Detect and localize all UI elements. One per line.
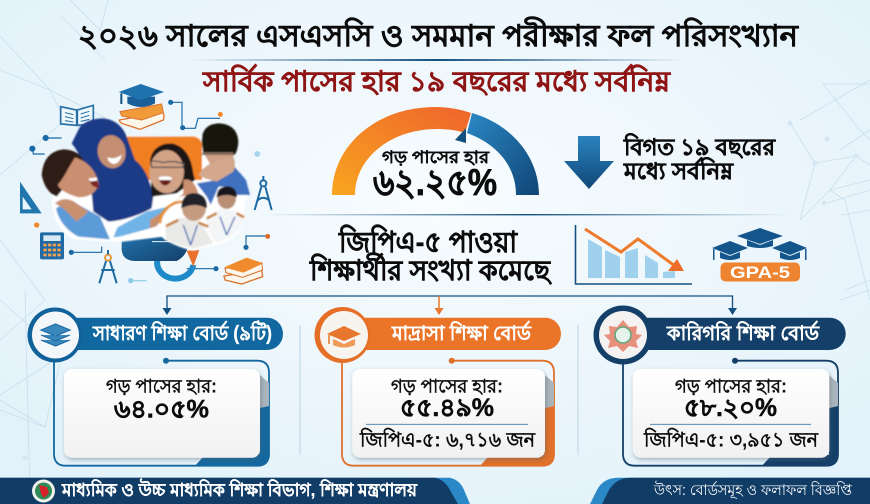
icon: down arrow: [564, 136, 614, 189]
panel: general education board: [28, 308, 283, 466]
icon: orange books: [224, 258, 263, 284]
callout: lowest in 19 years: [623, 133, 776, 184]
stat card: ৬৪.০৫%: [114, 396, 209, 424]
gauge: average pass rate 62.25%: [332, 107, 539, 203]
stat card: ৫৫.৪৯%: [400, 394, 494, 422]
network pattern right: [760, 80, 870, 345]
callout: lowest in 19 years: বিগত ১৯ বছরের: [623, 133, 776, 160]
stat card: গড় পাসের হার:: [106, 377, 217, 398]
icon: set square: [20, 182, 42, 213]
photo: two boys in white shirts: [155, 186, 244, 251]
circuit lines: [30, 100, 270, 283]
stat card: জিপিএ-৫: ৩,৯৫১ জন: [643, 428, 819, 452]
stat card: গড় পাসের হার:: [675, 377, 787, 398]
icon: graduation cap on books: [119, 84, 164, 129]
icon: GPA-5 caps: [712, 228, 807, 282]
title: ২০২৬ সালের এসএসসি ও সমমান পরীক্ষার ফল পরিসংখ্যান: [78, 16, 799, 53]
stat card: জিপিএ-৫: ৬,৭১৬ জন: [359, 428, 536, 452]
GPA-5 badge: GPA-5: [730, 263, 790, 282]
stat card: ৫৮.২০%: [684, 394, 777, 422]
subtitle: সার্বিক পাসের হার ১৯ বছরের মধ্যে সর্বনিম্ন: [202, 64, 672, 97]
board header: [28, 308, 283, 362]
network pattern left: [0, 0, 108, 500]
stat card: [352, 369, 545, 458]
heading: GPA-5 students decreased: [309, 224, 552, 286]
collage blue tab and ring: [122, 230, 199, 279]
board header: সাধারণ শিক্ষা বোর্ড (৯টি): [92, 320, 272, 345]
board header: [314, 307, 561, 363]
stat card: [633, 369, 829, 458]
stat card: [64, 369, 260, 458]
gauge value: ৬২.২৫%: [373, 162, 497, 203]
icon: open book: [61, 105, 93, 125]
board header: মাদ্রাসা শিক্ষা বোর্ড: [391, 320, 532, 345]
panel: technical education board: [594, 306, 846, 466]
panel outline: [623, 355, 838, 466]
gauge pointer: [455, 128, 466, 143]
stat card: গড় পাসের হার:: [391, 377, 503, 398]
footer left: ministry: [0, 478, 470, 504]
connector lines to boards: [162, 296, 737, 315]
callout: lowest in 19 years: মধ্যে সর্বনিম্ন: [623, 156, 734, 184]
chart: declining bars: [576, 225, 692, 284]
panel outline: [54, 355, 269, 466]
panel outline: [342, 355, 554, 466]
icon: compass right: [255, 176, 272, 210]
board header: [594, 306, 846, 364]
panel: madrasa education board: [314, 307, 561, 466]
photo collage with decorative education icons: [20, 84, 272, 284]
photo: students celebrating: [42, 118, 250, 247]
icon: calculator: [40, 232, 64, 259]
gauge blue arc: [467, 113, 539, 195]
footer left: ministry: মাধ্যমিক ও উচ্চ মাধ্যমিক শিক্ষা বিভাগ, শিক্ষা মন্ত্রণালয়: [61, 478, 418, 500]
footer right: source: [590, 478, 870, 504]
heading: GPA-5 students decreased: জিপিএ-৫ পাওয়া: [338, 224, 518, 259]
icon: compass lower: [99, 250, 117, 283]
board header: কারিগরি শিক্ষা বোর্ড: [666, 320, 820, 345]
heading: GPA-5 students decreased: শিক্ষার্থীর সংখ্যা কমেছে: [309, 252, 552, 286]
icon: government emblem: [32, 480, 55, 502]
gauge label: গড় পাসের হার: [382, 148, 490, 167]
gauge orange arc: [332, 107, 471, 195]
footer right: source: উৎস: বোর্ডসমূহ ও ফলাফল বিজ্ঞপ্তি: [653, 481, 853, 500]
